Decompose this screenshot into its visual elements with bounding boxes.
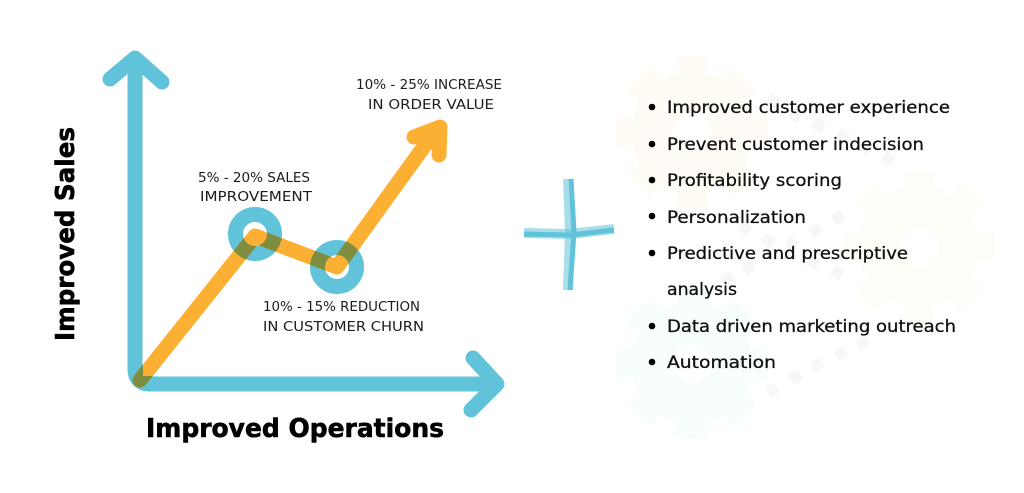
list item: Prevent customer indecision [667, 135, 924, 155]
gear: bottom left [624, 295, 760, 431]
y axis title: Improved Sales [51, 127, 81, 341]
overlap of trend line and axes [140, 355, 160, 380]
bullet markers [649, 104, 655, 365]
bullet list [649, 98, 956, 373]
marker: sales improvement ring [236, 214, 274, 254]
label: sales improvement: IMPROVEMENT [200, 189, 313, 205]
list item: Predictive and prescriptive [667, 244, 908, 264]
list item: Improved customer experience [667, 98, 950, 118]
label: churn reduction: IN CUSTOMER CHURN [263, 319, 424, 335]
label: churn reduction [263, 299, 424, 335]
axes [110, 58, 497, 410]
list item continuation: analysis [667, 280, 737, 300]
label: sales improvement: 5% - 20% SALES [198, 170, 310, 186]
list item: Personalization [667, 208, 806, 228]
list item: Data driven marketing outreach [667, 317, 956, 337]
background gears and dotted connectors [624, 64, 987, 431]
overlap of trend line and rings [234, 232, 358, 271]
list item: Profitability scoring [667, 171, 842, 191]
label: churn reduction: 10% - 15% REDUCTION [263, 299, 420, 315]
label: order value: 10% - 25% INCREASE [356, 77, 502, 93]
chart: sales vs operations [110, 58, 502, 410]
infographic canvas [54, 50, 979, 443]
gear: right [851, 179, 987, 315]
orange trend arrow [140, 127, 440, 380]
icon: brush plus sign [524, 179, 614, 290]
list item: Automation [667, 353, 776, 373]
dotted connectors [720, 93, 896, 398]
label: sales improvement [198, 170, 313, 205]
gear: top left [624, 64, 760, 200]
marker: churn reduction ring [318, 248, 356, 286]
label: order value: IN ORDER VALUE [368, 97, 494, 113]
x axis title: Improved Operations [146, 414, 444, 444]
label: order value [356, 77, 502, 113]
